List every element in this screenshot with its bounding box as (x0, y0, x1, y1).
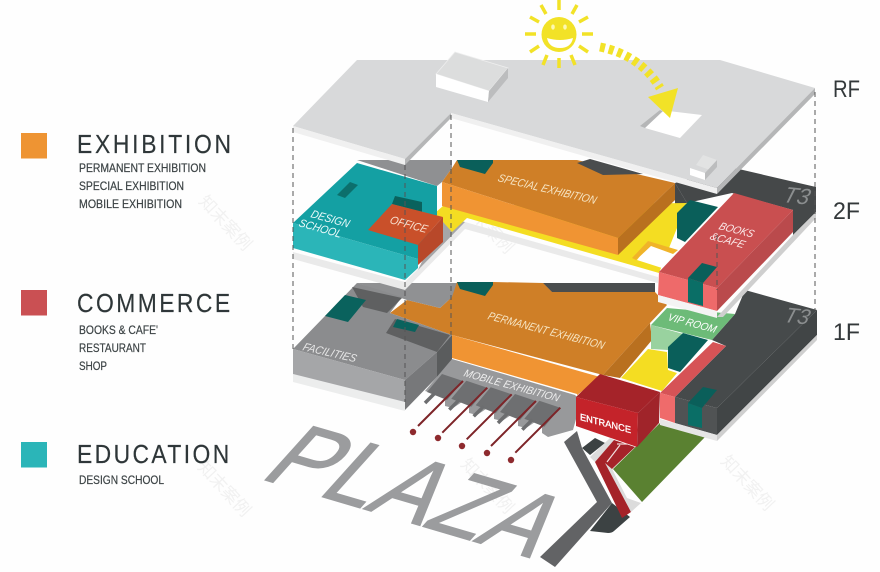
VIP room: VIP ROOM (666, 311, 719, 336)
2F courtyard opening (632, 241, 678, 268)
legend: education: DESIGN SCHOOL (79, 475, 165, 487)
design school block (293, 163, 437, 280)
road and entrance path (540, 431, 641, 567)
1F yellow area (621, 349, 677, 391)
books and cafe block: BOOKS (717, 221, 757, 240)
floor label 1F: 1F (833, 319, 860, 346)
books and cafe block (658, 193, 793, 318)
legend: exhibition: MOBILE EXHIBITION (79, 199, 182, 211)
T3 label 1F: T3 (782, 303, 813, 329)
special exhibition block: SPECIAL EXHIBITION (496, 172, 598, 207)
green lawn (613, 423, 706, 502)
facilities block: FACILITIES (301, 341, 359, 365)
1F back grey area (357, 283, 655, 300)
floor label 2F: 2F (833, 198, 860, 225)
mobile exhibition comb: MOBILE EXHIBITION (462, 367, 562, 405)
1F back grey notch (407, 283, 452, 308)
roof box large (436, 52, 508, 102)
books and cafe block: &CAFE (708, 231, 748, 251)
legend: commerce: RESTAURANT (79, 343, 146, 355)
1F restaurant strip (660, 342, 726, 423)
1F slab edge (293, 374, 405, 411)
1F T3 dark block (660, 290, 817, 441)
permanent exhibition block (390, 282, 667, 397)
watermarks: 知末案例 (717, 452, 777, 514)
VIP room (651, 308, 735, 350)
legend: exhibition: PERMANENT EXHIBITION (79, 163, 206, 175)
mobile exhibition comb (410, 359, 578, 463)
2F yellow floor (435, 203, 687, 273)
entrance block (576, 374, 660, 447)
arrow: sunlight into skylight (600, 47, 678, 118)
roof slab (293, 52, 815, 194)
facilities block (293, 283, 452, 410)
icon: smiling sun (525, 0, 593, 68)
watermarks: 知末案例 (457, 455, 517, 517)
2F floor (293, 159, 816, 318)
1F floor (293, 282, 817, 441)
entrance block: ENTRANCE (580, 412, 632, 436)
1F teal block (668, 333, 708, 372)
design school block: SCHOOL (297, 217, 343, 241)
watermarks: 知末案例 (457, 195, 517, 257)
legend: commerce: COMMERCE (77, 290, 230, 318)
floor label RF: RF (833, 76, 860, 103)
watermarks: 知末案例 (194, 458, 254, 520)
T3 label 2F: T3 (781, 182, 814, 209)
plaza ground lettering: PLAZA (243, 408, 593, 572)
design school block: DESIGN (309, 208, 352, 231)
legend: education: EDUCATION (77, 441, 229, 469)
permanent exhibition block: PERMANENT EXHIBITION (486, 310, 606, 352)
2F back grey area (357, 160, 452, 186)
office block: OFFICE (388, 214, 430, 236)
legend: commerce: BOOKS & CAFE' (79, 325, 158, 337)
special exhibition block (442, 159, 675, 255)
legend: education (21, 441, 229, 487)
office block (368, 204, 443, 265)
legend: commerce (21, 290, 230, 373)
watermarks: 知末案例 (195, 192, 255, 254)
2F teal block (677, 200, 718, 242)
dashed guide lines (293, 92, 815, 402)
legend: exhibition (21, 131, 231, 211)
legend: exhibition: SPECIAL EXHIBITION (79, 181, 184, 193)
2F office-side slab (418, 217, 465, 270)
2F T3 dark block (675, 167, 816, 317)
legend: exhibition: EXHIBITION (77, 131, 231, 159)
roof box small (690, 155, 717, 180)
watermarks (194, 192, 777, 520)
2F slab edge (293, 222, 658, 290)
legend: commerce: SHOP (79, 361, 107, 373)
roof skylight (640, 110, 702, 138)
1F dark strip (543, 283, 655, 292)
